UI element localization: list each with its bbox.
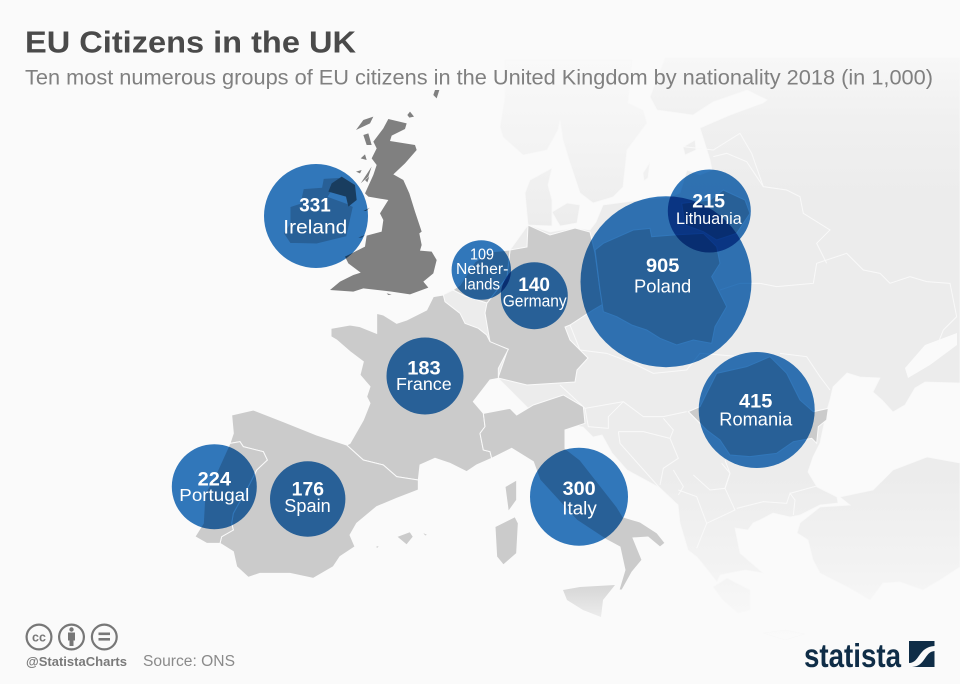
Portugal bbox=[195, 442, 267, 543]
label: Netherlands: lands bbox=[464, 276, 500, 293]
icon: creative commons: cc bbox=[32, 630, 46, 644]
Balkan country borders bbox=[560, 385, 735, 548]
Sardinia bbox=[495, 517, 518, 565]
label: Poland bbox=[634, 256, 691, 297]
label: France bbox=[396, 358, 452, 394]
United Kingdom, dark grey bbox=[328, 90, 439, 295]
credit handle: @StatistaCharts bbox=[26, 654, 127, 669]
Hebrides and islands bbox=[356, 90, 439, 295]
label: Lithuania: Lithuania bbox=[676, 210, 742, 228]
light land: Saaremaa bbox=[683, 140, 696, 155]
label: Netherlands: Nether- bbox=[456, 261, 508, 278]
bubbles bbox=[172, 164, 815, 546]
label: Germany: 140 bbox=[518, 275, 550, 296]
label: Italy: Italy bbox=[562, 498, 597, 518]
source: Source: ONS bbox=[143, 653, 235, 670]
label: Lithuania bbox=[676, 191, 742, 228]
bubble: Germany bbox=[501, 262, 568, 329]
Romania bbox=[688, 357, 828, 457]
eastern country borders bbox=[570, 133, 957, 390]
light land: Gotland bbox=[643, 162, 650, 181]
bubble: Netherlands bbox=[452, 240, 511, 300]
label: Italy: 300 bbox=[563, 479, 596, 500]
bubble labels bbox=[179, 191, 793, 518]
label: Poland: Poland bbox=[634, 277, 691, 297]
label: Romania: Romania bbox=[719, 409, 793, 429]
bubble: Poland bbox=[580, 196, 752, 367]
label: Ireland: Ireland bbox=[283, 216, 347, 238]
label: Spain: 176 bbox=[292, 480, 324, 501]
label: Poland: 905 bbox=[646, 256, 680, 277]
label: Ireland bbox=[283, 196, 347, 238]
Sicily bbox=[563, 585, 615, 617]
light land: Danish islands bbox=[552, 203, 580, 226]
icon: creative commons bbox=[27, 625, 117, 649]
bubble: Italy bbox=[530, 448, 628, 546]
Netherlands bbox=[453, 250, 510, 303]
Germany bbox=[485, 225, 605, 385]
logo: statista: statista bbox=[804, 637, 902, 674]
subtitle: Ten most numerous groups of EU citizens in the United Kingdom by nationality 2018 (in 1,000) bbox=[25, 66, 933, 90]
bubble: Spain bbox=[270, 461, 345, 537]
France bbox=[331, 295, 508, 480]
bubble: Lithuania bbox=[668, 170, 751, 252]
label: Lithuania: 215 bbox=[692, 191, 725, 212]
sea of Azov bbox=[905, 333, 957, 378]
Poland bbox=[595, 228, 727, 345]
label: France: France bbox=[396, 374, 452, 394]
Irish and western countries with citizen groups, medium grey bbox=[195, 177, 828, 590]
label: Germany bbox=[503, 275, 567, 311]
label: Portugal bbox=[179, 469, 249, 505]
label: Portugal: Portugal bbox=[179, 485, 249, 505]
label: Germany: Germany bbox=[503, 293, 567, 311]
label: Spain: Spain bbox=[284, 496, 331, 516]
bubble: France bbox=[386, 338, 464, 414]
label: Portugal: 224 bbox=[198, 469, 231, 490]
map of Europe bbox=[195, 58, 960, 640]
light land: Denmark bbox=[525, 168, 552, 226]
Corsica bbox=[505, 480, 517, 512]
label: Romania bbox=[719, 392, 793, 429]
title: EU Citizens in the UK bbox=[25, 24, 357, 60]
light land: Norway and Sweden bbox=[500, 60, 647, 203]
Italy bbox=[480, 395, 665, 590]
light land: Turkey bbox=[797, 457, 960, 600]
label: France: 183 bbox=[407, 358, 441, 379]
bubble: Ireland bbox=[264, 164, 368, 268]
bubble: Romania bbox=[699, 352, 815, 468]
Lithuania bbox=[682, 190, 750, 240]
label: Romania: 415 bbox=[739, 392, 773, 413]
label: Ireland: 331 bbox=[299, 196, 331, 217]
bubble: Portugal bbox=[172, 444, 257, 529]
Spain bbox=[220, 410, 418, 578]
label: Italy bbox=[562, 479, 597, 518]
light land: Crete and Cyprus bbox=[763, 630, 805, 640]
label: Spain bbox=[284, 480, 331, 516]
Balearic islands bbox=[375, 532, 428, 549]
light land: eastern and central Europe bbox=[441, 58, 960, 640]
label: Netherlands: 109 bbox=[470, 246, 494, 263]
label: Netherlands bbox=[456, 246, 508, 293]
light land: Peloponnese bbox=[713, 578, 750, 613]
Northern Ireland bbox=[328, 177, 357, 207]
Ireland bbox=[283, 177, 353, 244]
